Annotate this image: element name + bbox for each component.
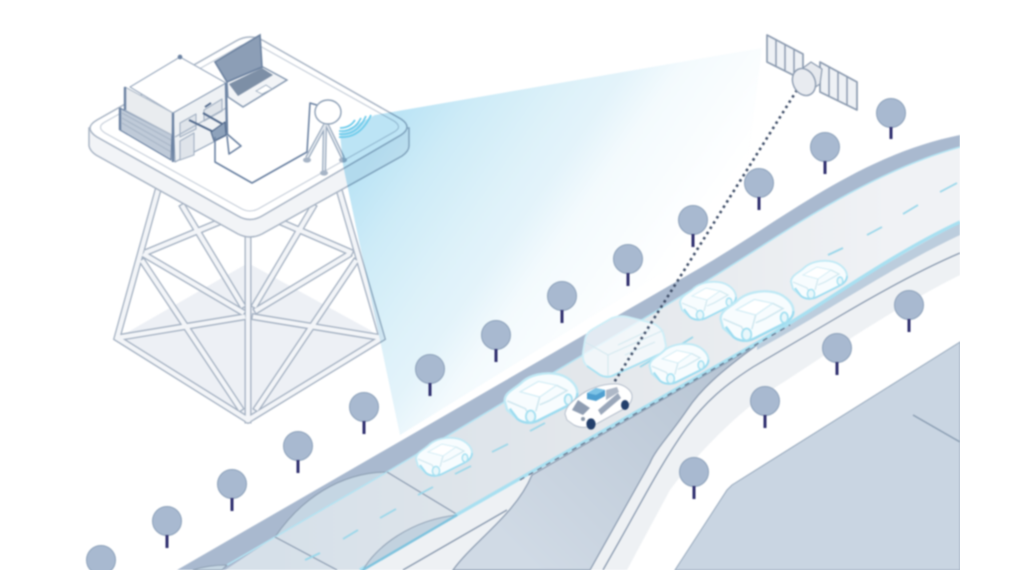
lower verge band xyxy=(360,222,960,570)
satellite xyxy=(767,35,857,110)
tower lattice xyxy=(117,190,382,420)
blue-grey verge strip xyxy=(757,222,960,350)
trees along lower roadside xyxy=(680,290,924,499)
ghost car 6 xyxy=(791,261,847,299)
dotted satellite link xyxy=(613,90,797,384)
tower ground shadow xyxy=(128,266,372,413)
ghost car 1 xyxy=(416,438,472,476)
wireless signal waves xyxy=(339,115,371,137)
laptop xyxy=(215,35,287,107)
kerb lens xyxy=(363,515,457,570)
ego car xyxy=(565,384,632,430)
upper road curb xyxy=(177,135,960,570)
road edge lines xyxy=(227,147,960,570)
trees along upper roadside xyxy=(86,98,906,576)
lower-right ground block xyxy=(675,342,960,570)
ghost car 5 xyxy=(721,291,793,341)
ghost car 2 xyxy=(505,373,577,423)
road bulge lower-left xyxy=(193,565,227,570)
road surface xyxy=(225,147,960,570)
equipment rack xyxy=(120,55,227,162)
cable xyxy=(215,103,320,183)
ghost car 4 xyxy=(680,282,736,320)
ghost van xyxy=(583,316,666,377)
platform xyxy=(89,37,409,237)
lane dashes xyxy=(305,183,957,560)
lower verge lines xyxy=(403,253,960,570)
tripod antenna xyxy=(303,100,347,176)
signal beam xyxy=(340,56,726,434)
ghost car 3 xyxy=(650,344,708,384)
road bulge left xyxy=(275,472,387,537)
ground block line xyxy=(913,415,960,442)
lower grey wedge xyxy=(453,345,757,570)
